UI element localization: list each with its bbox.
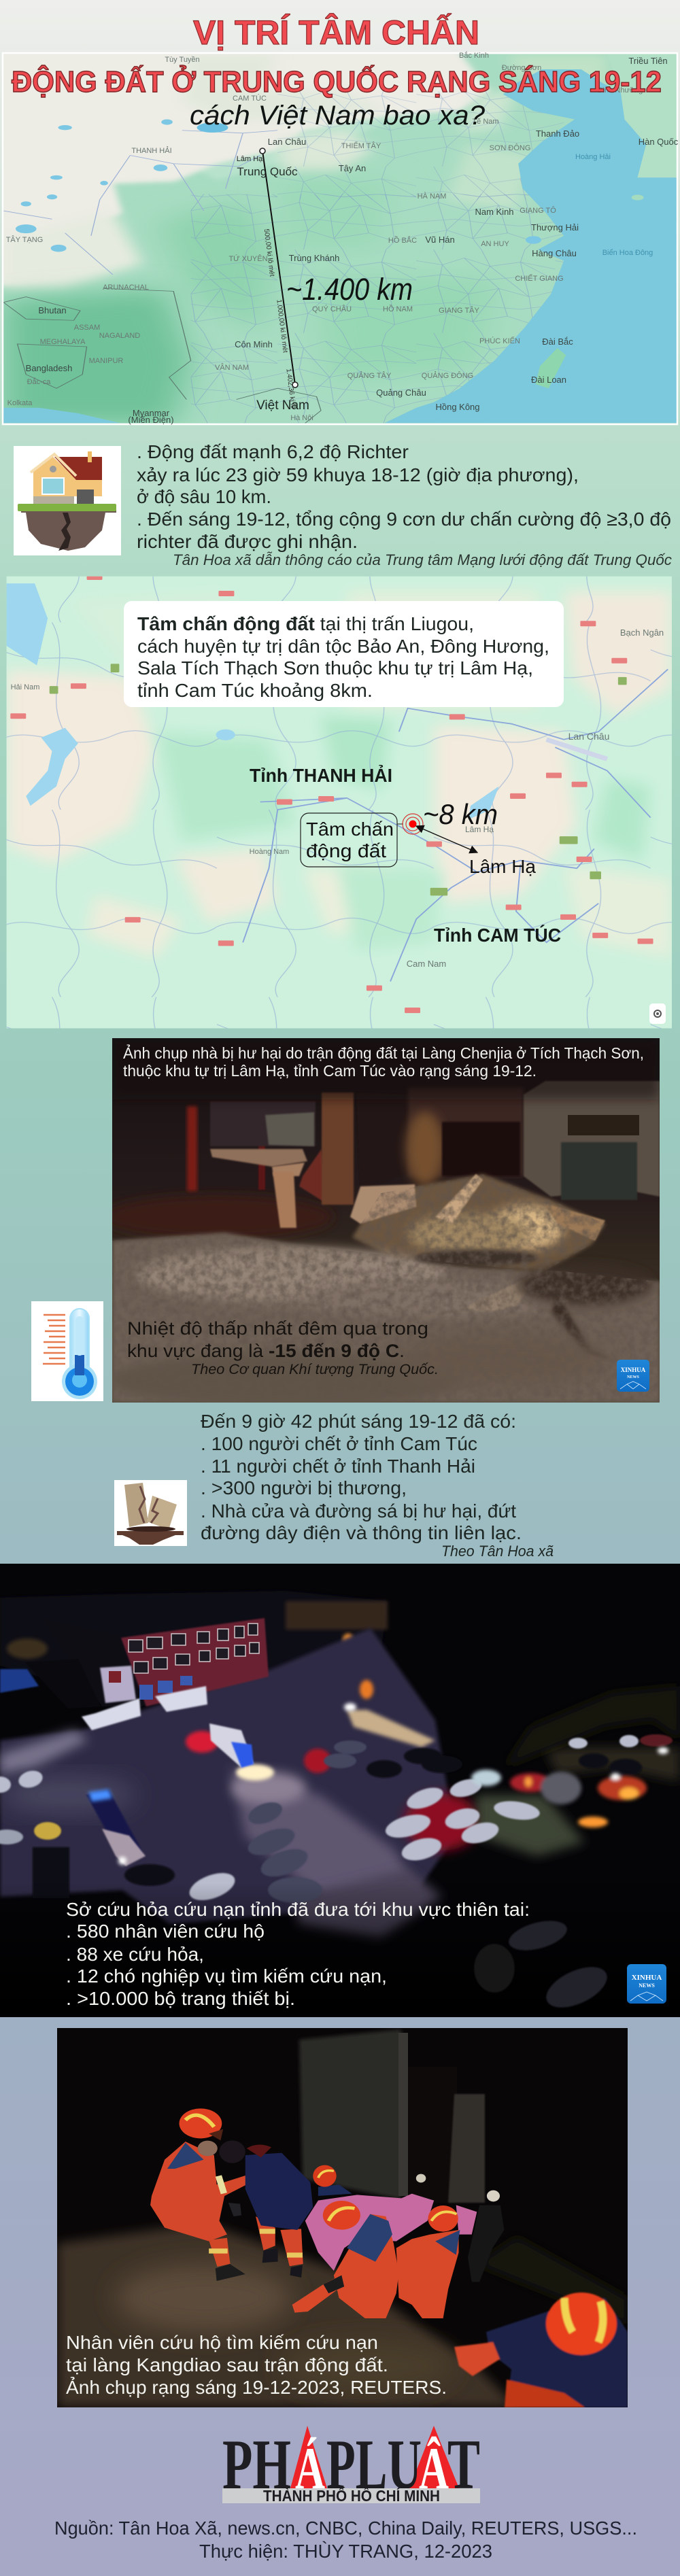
temperature note <box>127 1318 439 1377</box>
map 1 place labels: CHIẾT GIANG <box>515 274 564 283</box>
map 2 small labels <box>11 628 664 969</box>
temperature note: Nhiệt độ thấp nhất đêm qua trong <box>127 1318 428 1339</box>
map 1 place labels: Đắc-ca <box>27 377 51 386</box>
map 1 place labels: QUÝ CHÂU <box>312 305 352 313</box>
photo: rescuers carrying a victim <box>57 2028 628 2407</box>
cars <box>0 1734 673 1906</box>
logo: Phap Luat TP.HCM: Á <box>295 2436 325 2502</box>
map 1 place labels: THIỂM TÂY <box>341 141 381 150</box>
map 1 place labels: SƠN ĐÔNG <box>490 143 530 152</box>
map 1 place labels: Hà Nội <box>290 414 313 422</box>
map 1 place labels: TÂY TẠNG <box>6 235 43 244</box>
rescuer left <box>150 2108 253 2281</box>
map 1 place labels: Tế Nam <box>472 118 499 126</box>
subheading question: cách Việt Nam bao xa? <box>190 101 486 131</box>
epicentre label box: Tâm chấn <box>306 819 394 840</box>
map 1 place labels: NAGALAND <box>99 332 140 340</box>
map 1 place labels: Trùng Khánh <box>289 253 339 263</box>
map 2 small labels: Hải Nam <box>11 683 39 691</box>
text: casualties list: . Nhà cửa và đường sá bị hư hại, đứt <box>201 1500 516 1522</box>
map 1 place labels: Quảng Châu <box>376 388 426 398</box>
logo: Phap Luat TP.HCM: THÀNH PHỐ HỒ CHÍ MINH <box>263 2486 440 2505</box>
map 2 small labels: Lâm Hạ <box>465 825 494 834</box>
heading: epicentre location: VỊ TRÍ TÂM CHẤN <box>193 14 479 52</box>
badge: Xinhua News: XINHUA <box>632 1974 662 1982</box>
map 2 small labels: Lan Châu <box>568 731 609 742</box>
map 1 place labels: Hoàng Hải <box>575 153 611 161</box>
map 2 small labels: Cam Nam <box>407 959 446 969</box>
rescuer right <box>396 2205 460 2318</box>
ground <box>0 1628 456 1924</box>
map 1 place labels: Hàng Châu <box>532 248 577 258</box>
text: casualties list <box>201 1411 522 1543</box>
map 1 place labels: Đài Loan <box>531 375 566 385</box>
map 1 place labels: HỒ NAM <box>383 305 413 313</box>
map 1 place labels: Triều Tiên <box>628 56 668 66</box>
credits <box>54 2518 637 2562</box>
text: quake facts: richter đã được ghi nhận. <box>137 531 358 552</box>
map 1 place labels: PHÚC KIẾN <box>479 337 520 345</box>
map 1 place labels: Bhutan <box>38 305 67 315</box>
map 1 place labels: Đường Sơn <box>502 64 541 72</box>
panel: damage photo <box>102 1038 660 1407</box>
badge: Xinhua News: NEWS <box>639 1982 655 1989</box>
text: rescue resources: . 12 chó nghiệp vụ tìm kiếm cứu nạn, <box>66 1965 387 1987</box>
map 1 place labels: Hồng Kông <box>435 402 480 412</box>
photo caption <box>123 1043 644 1080</box>
badge: Xinhua News: XINHUA <box>621 1367 646 1373</box>
map 1 place labels: Myanmar <box>133 408 170 418</box>
text: quake facts: xảy ra lúc 23 giờ 59 khuya 18-12 (giờ địa phương), <box>137 464 579 485</box>
temperature note: Theo Cơ quan Khí tượng Trung Quốc. <box>191 1362 439 1377</box>
building <box>121 1618 269 1706</box>
photo caption: Ảnh chụp nhà bị hư hại do trận động đất tại Làng Chenjia ở Tích Thạch Sơn, <box>123 1043 644 1062</box>
text: rescue resources <box>66 1899 530 2009</box>
distance label: ~1.400 km <box>286 272 413 307</box>
logo: Phap Luat TP.HCM: Â <box>419 2436 449 2502</box>
text: rescue resources: Sở cứu hỏa cứu nạn tỉnh đã đưa tới khu vực thiên tai: <box>66 1899 530 1920</box>
map 2 small labels: Hoàng Nam <box>250 848 289 856</box>
badge: Xinhua News: NEWS <box>627 1375 639 1379</box>
author line: Thực hiện: THÙY TRANG, 12-2023 <box>199 2541 492 2562</box>
map 1 place labels: HỒ BẮC <box>388 236 417 245</box>
map 1 place labels: Biển Hoa Đông <box>602 249 653 257</box>
text: photo caption <box>66 2332 447 2398</box>
panel: distance map <box>0 41 680 425</box>
province label: Cam Tuc: Tỉnh CAM TÚC <box>434 925 561 946</box>
panel: earthquake facts <box>14 441 672 568</box>
map 1 place labels: Kolkata <box>7 399 33 407</box>
logo: Phap Luat TP.HCM <box>222 2424 480 2505</box>
text: photo caption: Ảnh chụp rạng sáng 19-12-2023, REUTERS. <box>66 2376 447 2398</box>
map 1 place labels: QUẢNG TÂY <box>347 371 392 380</box>
map 1 place labels: GIANG TÔ <box>520 206 556 215</box>
rescuer foreground <box>454 2292 628 2407</box>
icon: collapsed building <box>114 1480 187 1546</box>
distance line: 500,00 ki lô mét <box>262 228 275 277</box>
badge: Xinhua News <box>617 1360 649 1392</box>
panel: casualty figures <box>114 1411 554 1560</box>
text: quake facts: ở độ sâu 10 km. <box>137 486 271 507</box>
sources line: Nguồn: Tân Hoa Xã, news.cn, CNBC, China Daily, REUTERS, USGS... <box>54 2518 637 2539</box>
map 1 place labels: AN HUY <box>481 240 509 248</box>
badge: Xinhua News <box>627 1964 666 2004</box>
province label: Thanh Hai: Tỉnh THANH HẢI <box>250 764 392 786</box>
heading: earthquake date: ĐỘNG ĐẤT Ở TRUNG QUỐC RẠNG SÁNG 19-12 <box>12 64 662 99</box>
callout: epicentre description: Sala Tích Thạch Sơn thuộc khu tự trị Lâm Hạ, <box>137 657 533 679</box>
distance label: 8 km: ~8 km <box>423 798 498 830</box>
map 1 place labels: HÀ NAM <box>418 192 446 201</box>
text: quake facts: . Đến sáng 19-12, tổng cộng 9 cơn dư chấn cường độ ≥3,0 độ <box>137 509 671 530</box>
text: rescue resources: . 88 xe cứu hỏa, <box>66 1944 204 1965</box>
rescuer centre <box>292 2201 399 2318</box>
map 1 artwork <box>0 41 680 424</box>
photo: collapsed house rubble <box>102 1038 660 1407</box>
map 2 small labels: Bạch Ngân <box>620 628 664 638</box>
epicentre label box <box>301 813 403 867</box>
source note: Tân Hoa xã dẫn thông cáo của Trung tâm Mạng lưới động đất Trung Quốc <box>173 551 672 568</box>
map 1 place labels: Bình Nhưỡng <box>598 86 643 95</box>
map 1 place labels <box>6 51 679 425</box>
trucks <box>82 1698 141 1730</box>
photo: night aerial of rescue vehicles <box>0 1564 680 2017</box>
blanket <box>305 2194 434 2271</box>
text: casualties list: Đến 9 giờ 42 phút sáng 19-12 đã có: <box>201 1411 516 1432</box>
map 1 place labels: Tây An <box>339 163 366 173</box>
callout: epicentre description: Tâm chấn động đất tại thị trấn Liugou, <box>137 613 474 634</box>
map 1 place labels: Trung Quốc <box>237 165 298 178</box>
map 1 place labels: Thanh Đảo <box>536 128 579 139</box>
temperature note: khu vực đang là -15 đến 9 độ C . <box>127 1341 405 1361</box>
map 1 place labels: MANIPUR <box>89 357 123 365</box>
epicentre label box: động đất <box>306 840 386 861</box>
arrow: 8 km distance <box>416 826 477 853</box>
map 2 locator button <box>649 1003 666 1024</box>
distance line: 1.402,36 ki lô <box>284 368 297 409</box>
callout: epicentre description <box>124 601 564 707</box>
panel: rescue aerial photo <box>0 1564 680 2017</box>
map 1 place labels: ASSAM <box>74 324 100 332</box>
map 1 place labels: TỨ XUYÊN <box>228 254 268 263</box>
callout: epicentre description: cách huyện tự trị dân tộc Bảo An, Đông Hương, <box>137 636 549 657</box>
map 1 place labels: Nam Kinh <box>475 207 514 217</box>
panel: rescuers photo <box>57 2028 628 2407</box>
map 1 place labels: Bắc Kinh <box>459 51 489 60</box>
logo: Phap Luat TP.HCM: PLU <box>326 2424 422 2504</box>
figures in detail coordinates <box>150 2108 505 2318</box>
map 1 place labels: GIANG TÂY <box>439 306 480 315</box>
map 1 place labels: Lâm Hạ <box>237 155 263 163</box>
map 2 artwork <box>0 576 680 1030</box>
map 1 place labels: QUẢNG ĐÔNG <box>422 371 473 380</box>
map 1 place labels: Đài Bắc <box>542 337 573 347</box>
text: quake facts: . Động đất mạnh 6,2 độ Richter <box>137 441 409 462</box>
fires and lights <box>118 1680 668 1865</box>
map 1 place labels: Côn Minh <box>235 339 273 349</box>
text: casualties list: . 100 người chết ở tỉnh Cam Túc <box>201 1433 477 1454</box>
map 1 place labels: Lan Châu <box>268 137 306 147</box>
map 1 place labels: THANH HẢI <box>131 146 172 155</box>
text: photo caption: tại làng Kangdiao sau trận động đất. <box>66 2354 388 2375</box>
title <box>12 14 662 131</box>
text: casualties list: đường dây điện và thông tin liên lạc. <box>201 1522 522 1543</box>
map 1 place labels: (Miến Điện) <box>128 415 174 425</box>
bystanders <box>416 2174 505 2282</box>
rescuer rear <box>313 2165 352 2196</box>
rescuer in blue <box>219 2140 313 2278</box>
map 1 place labels: CAM TÚC <box>233 94 267 103</box>
map 1 white border <box>3 53 677 424</box>
text: rescue resources: . 580 nhân viên cứu hộ <box>66 1921 265 1942</box>
logo: Phap Luat TP.HCM: T <box>447 2424 480 2504</box>
map 1 place labels: Thượng Hải <box>531 222 579 233</box>
text: photo caption: Nhân viên cứu hộ tìm kiếm cứu nạn <box>66 2332 378 2353</box>
distance line <box>260 148 298 409</box>
panel: epicentre map <box>0 576 680 1030</box>
map 1 place labels: Vũ Hán <box>425 235 455 245</box>
map 1 place labels: ARUNACHAL <box>103 284 149 292</box>
logo: Phap Luat TP.HCM: PH <box>222 2424 291 2504</box>
map 1 place labels: Việt Nam <box>256 398 309 413</box>
text: casualties list: . 11 người chết ở tỉnh Thanh Hải <box>201 1456 475 1477</box>
icon: epicentre marker <box>403 814 423 834</box>
text: rescue resources: . >10.000 bộ trang thiết bị. <box>66 1988 295 2009</box>
map 1 place labels: Hàn Quốc <box>639 137 679 147</box>
map 1 place labels: Bangladesh <box>26 363 72 373</box>
text: casualties list: . >300 người bị thương, <box>201 1477 407 1498</box>
source note: Theo Tân Hoa xã <box>441 1543 554 1560</box>
city label: Lam Ha: Lâm Hạ <box>469 856 536 877</box>
callout: epicentre description: tỉnh Cam Túc khoảng 8km. <box>137 680 373 701</box>
map 1 place labels: Tùy Tuyền <box>165 56 200 64</box>
photo caption: thuộc khu tự trị Lâm Hạ, tỉnh Cam Túc vào rạng sáng 19-12. <box>123 1062 537 1080</box>
icon: thermometer <box>31 1301 103 1401</box>
distance line: 1.000,00 ki lô mét <box>275 299 289 354</box>
map 1 place labels: MEGHALAYA <box>40 338 86 346</box>
icon: cracked house <box>14 446 121 555</box>
text: quake facts <box>137 441 671 552</box>
map 1 place labels: VÂN NAM <box>215 363 249 372</box>
